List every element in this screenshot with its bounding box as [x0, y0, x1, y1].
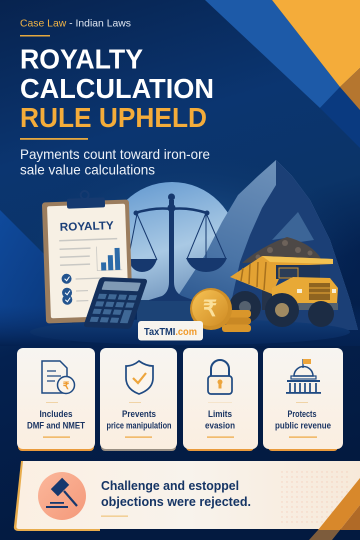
icon: scales of justice — [128, 194, 227, 301]
title — [20, 44, 214, 140]
title: CALCULATION — [20, 73, 214, 104]
label: Protects — [288, 409, 316, 419]
callout text: Challenge and estoppel — [101, 479, 239, 493]
icon: shield with check — [126, 361, 153, 394]
title: RULE UPHELD — [20, 102, 207, 133]
badge: TaxTMI.com — [138, 321, 203, 340]
icon: calculator — [83, 277, 148, 329]
kicker: Case Law - Indian Laws — [20, 18, 131, 36]
icon: dump truck — [229, 237, 338, 327]
badge: TaxTMI.com: TaxTMI.com — [144, 326, 197, 338]
icon: clipboard: ROYALTY — [60, 220, 114, 234]
icon: mountain — [172, 160, 358, 330]
label: public revenue — [275, 420, 331, 430]
panel: Protects public revenue — [263, 348, 343, 451]
title: ROYALTY — [20, 44, 143, 74]
label: DMF and NMET — [27, 420, 85, 430]
icon: rupee coin stack — [190, 288, 251, 332]
label: Prevents — [122, 409, 156, 419]
panel: Limits evasion — [183, 348, 258, 451]
subtitle: sale value calculations — [20, 162, 155, 178]
label: Limits — [208, 409, 232, 419]
icon: rupee coin stack: ₹ — [203, 296, 217, 321]
kicker: Case Law - Indian Laws: Case Law - Indian Laws — [20, 18, 131, 30]
label: Includes — [40, 409, 72, 419]
icon: government building — [286, 359, 321, 394]
icon: padlock — [208, 360, 232, 394]
pedestal — [137, 300, 193, 321]
callout: challenge and estoppel objections — [14, 461, 360, 540]
backdrop disc — [106, 182, 238, 314]
label: price manipulation — [106, 420, 172, 430]
panel: Includes DMF and NMET — [17, 348, 95, 451]
subtitle: Payments count toward iron-ore — [20, 146, 210, 162]
ground — [30, 319, 350, 345]
callout text: objections were rejected. — [101, 495, 251, 509]
subtitle — [20, 146, 210, 178]
icon: document with rupee: ₹ — [63, 381, 70, 392]
icon: gavel — [38, 472, 86, 520]
illustration: mining and royalty scene — [30, 160, 358, 345]
label: evasion — [205, 420, 235, 430]
icon: clipboard — [42, 190, 133, 323]
panel: Prevents price manipulation — [100, 348, 177, 451]
